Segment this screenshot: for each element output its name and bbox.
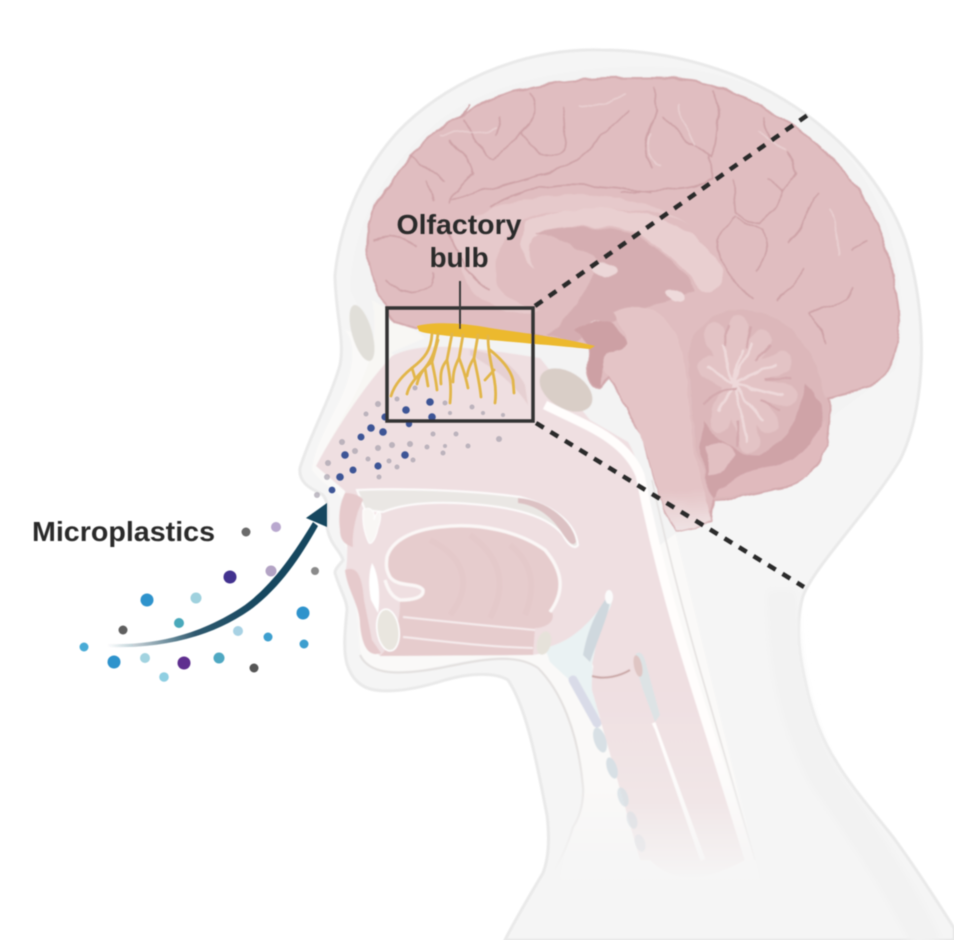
arytenoid cap — [632, 654, 644, 678]
cerebrum outline — [367, 78, 899, 530]
icon: frontal sinus — [344, 302, 380, 364]
brainstem — [604, 308, 712, 530]
tongue fibre shading — [430, 535, 531, 618]
upper tooth — [363, 508, 381, 543]
white oesophagus slit — [653, 723, 703, 860]
label: Olfactory bulb: Olfactory — [396, 209, 522, 240]
thalamus — [535, 227, 695, 342]
arytenoid cartilage — [634, 652, 660, 722]
pineal spot — [664, 288, 686, 304]
vocal fold line — [592, 670, 630, 678]
hyoid and larynx membrane — [545, 594, 612, 725]
head anatomy illustration — [300, 50, 954, 940]
airway outline — [652, 480, 755, 860]
cerebellum lobes — [708, 326, 786, 442]
lower lip and chin — [345, 569, 381, 654]
corpus callosum — [522, 208, 722, 291]
medial frontal light gyrus — [453, 195, 690, 313]
tongue white outline — [385, 526, 560, 612]
arrow head — [306, 503, 327, 527]
jaw muscle lines — [403, 617, 535, 648]
olfactory nerve fibres — [391, 334, 514, 403]
epiglottis tip — [605, 590, 613, 604]
icon: olfactory bulb and nerve — [391, 323, 595, 403]
cerebellum dark crescent — [701, 385, 823, 500]
cerebellum outer folia — [716, 420, 827, 498]
inner neck line — [360, 655, 583, 875]
lower tooth root — [374, 608, 402, 652]
lower tooth — [369, 563, 379, 613]
sulci — [373, 87, 867, 343]
fornix spot — [588, 321, 606, 333]
darker turbinate tissue — [470, 350, 528, 405]
face and neck inner skin — [312, 330, 760, 880]
particles inside nose — [314, 386, 505, 498]
throat wall pink — [592, 604, 700, 860]
grey nasal particles — [314, 386, 505, 498]
nasal, oral and pharynx tissue — [316, 347, 745, 877]
inhalation arrow and particles — [80, 503, 327, 682]
hypothalamus dark — [575, 321, 627, 386]
skull top inner band — [350, 67, 902, 560]
leader line — [459, 281, 461, 329]
callout box: olfactory region — [32, 112, 812, 587]
arbor vitae — [708, 345, 782, 440]
zoom guide dashed line lower — [536, 423, 804, 587]
blue nasal particles — [329, 398, 436, 493]
callout rectangle — [387, 308, 533, 421]
olfactory tract — [417, 323, 595, 349]
upper lip — [339, 493, 363, 547]
label: Microplastics: Microplastics — [32, 516, 215, 547]
airway white stripe — [545, 405, 750, 862]
cerebellum base — [690, 309, 828, 502]
head silhouette — [300, 50, 954, 940]
neck inner shading band — [782, 590, 928, 940]
icon: sphenoid sinus — [532, 359, 600, 421]
label: Olfactory bulb: bulb — [429, 242, 489, 273]
light gyrus highlights — [440, 95, 838, 255]
brain — [367, 78, 899, 530]
soft palate — [518, 498, 576, 544]
tracheal rings — [590, 726, 648, 853]
palate band — [357, 489, 578, 547]
epiglottis blue cartilage — [583, 595, 610, 662]
arrow shaft — [105, 522, 318, 647]
zoom guide dashed line upper — [535, 112, 812, 306]
airborne microplastic particles — [80, 522, 319, 682]
cerebellum lower lobule — [707, 444, 736, 476]
hyoid bone — [534, 630, 554, 656]
cerebellum fissures — [704, 325, 790, 448]
thyroid cartilage lavender — [573, 680, 597, 723]
forehead bone — [322, 300, 425, 455]
ventricle spots — [590, 259, 618, 279]
tongue and jaw muscle — [380, 526, 560, 656]
